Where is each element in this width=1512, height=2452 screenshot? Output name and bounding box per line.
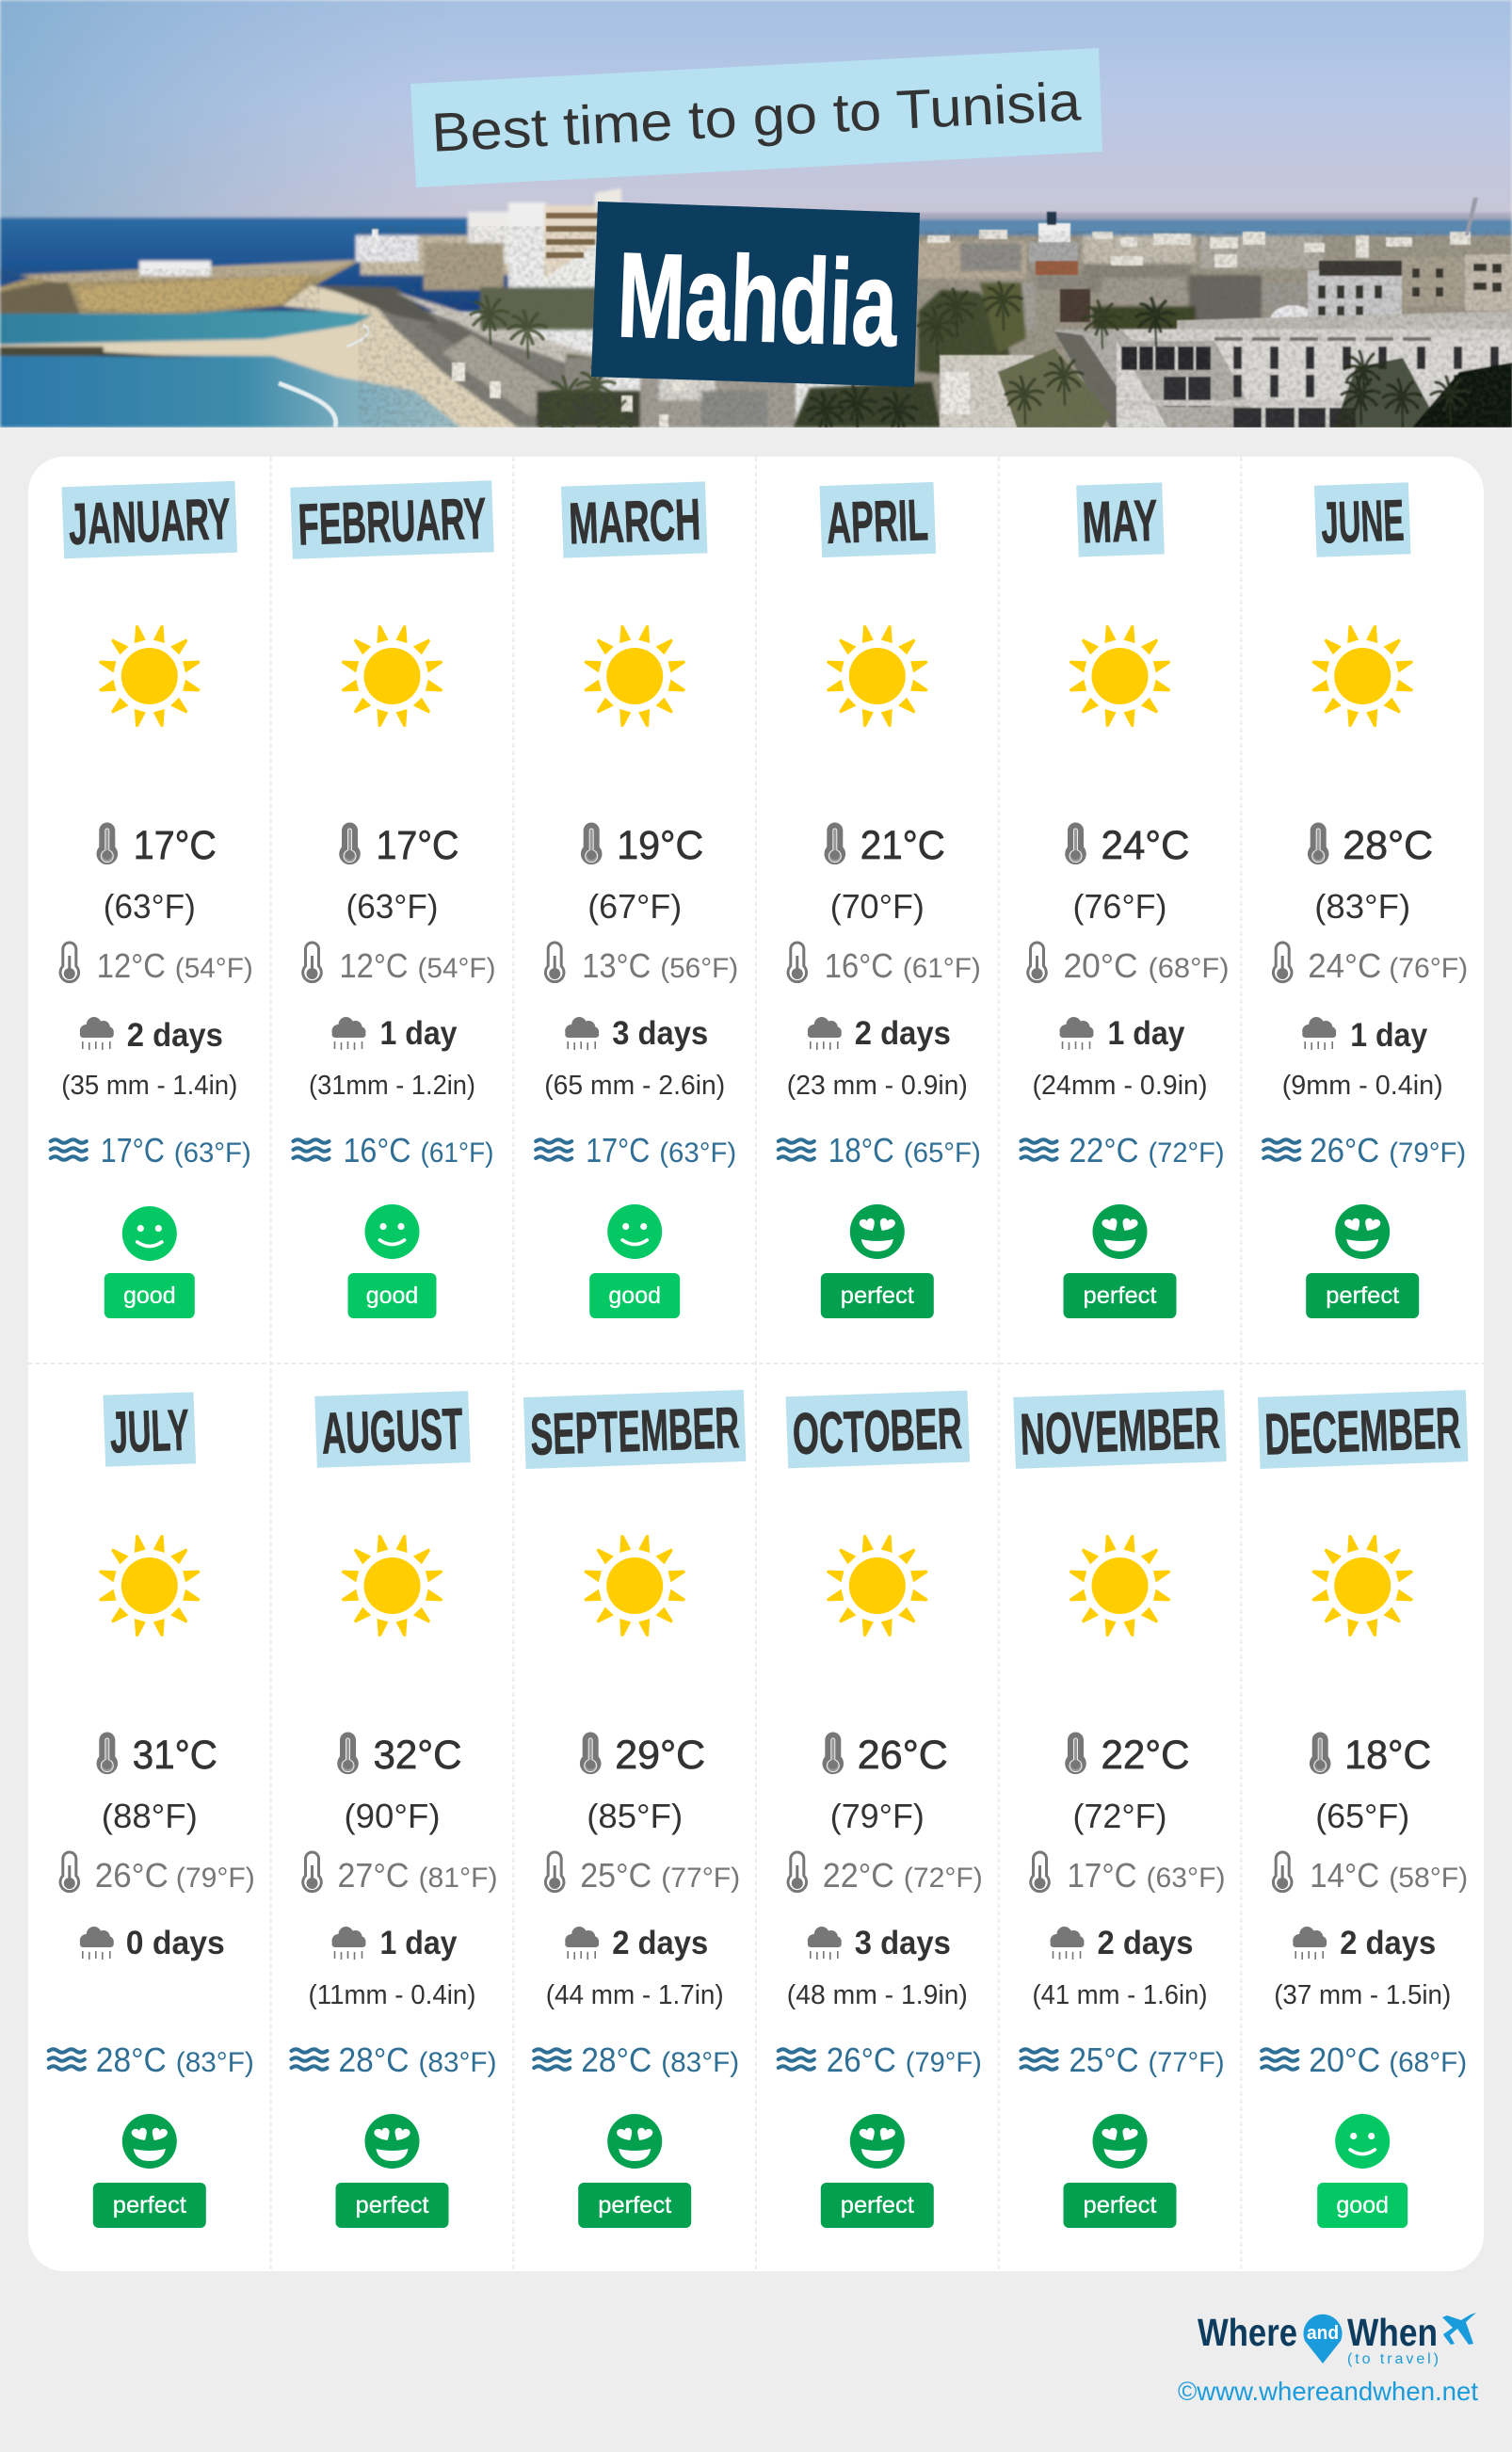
month label: APRIL xyxy=(826,488,929,557)
sea temperature: 25°C xyxy=(1070,2041,1139,2079)
sea temperature xyxy=(1262,2041,1467,2079)
low temperature: (54°F) xyxy=(175,953,253,984)
logo: Where and When (to travel): When xyxy=(1347,2311,1438,2354)
rainfall: (9mm - 0.4in) xyxy=(1282,1071,1443,1101)
sea temperature: (61°F) xyxy=(420,1137,493,1169)
rain days: 1 day xyxy=(1107,1015,1185,1052)
month: April xyxy=(779,482,981,1318)
month label: FEBRUARY xyxy=(297,487,488,557)
rain days xyxy=(808,1925,951,1961)
low temperature: (81°F) xyxy=(418,1863,498,1894)
low temperature: 27°C xyxy=(337,1856,409,1895)
sea temperature: (72°F) xyxy=(1149,1137,1224,1169)
sea temperature: 17°C xyxy=(101,1131,165,1170)
low temperature: 20°C xyxy=(1064,946,1137,985)
title banner: Best time to go to Tunisia: Best time to go to Tunisia xyxy=(430,71,1083,164)
icon: sun xyxy=(1311,625,1414,727)
low temperature: (54°F) xyxy=(418,953,495,984)
rain days: 2 days xyxy=(127,1017,223,1054)
high temperature xyxy=(341,823,459,868)
rating: perfect xyxy=(1064,2114,1177,2228)
month: November xyxy=(1013,1390,1227,2228)
sea temperature xyxy=(536,1131,736,1170)
low temperature: 26°C xyxy=(95,1856,169,1895)
rain days xyxy=(1302,1017,1428,1054)
low temperature xyxy=(1273,1852,1468,1895)
sea temperature: 18°C xyxy=(828,1131,894,1170)
fine photo detail xyxy=(279,198,1512,445)
rating: perfect xyxy=(335,2114,448,2228)
rain days: 2 days xyxy=(1340,1925,1436,1961)
rating: perfect: perfect xyxy=(1083,1282,1157,1309)
high temperature: 24°C xyxy=(1102,823,1190,868)
sea temperature xyxy=(779,1131,981,1170)
rain days xyxy=(80,1925,225,1961)
icon: sun xyxy=(826,625,928,727)
sea temperature: 26°C xyxy=(827,2041,896,2079)
logo: Where and When (to travel) xyxy=(1198,2311,1476,2367)
high fahrenheit: (85°F) xyxy=(587,1797,683,1835)
rain days xyxy=(565,1925,708,1961)
month label xyxy=(820,482,936,557)
month label: SEPTEMBER xyxy=(529,1395,740,1468)
rating: good xyxy=(348,1204,437,1318)
high temperature: 19°C xyxy=(617,823,703,868)
rainfall: (44 mm - 1.7in) xyxy=(546,1980,724,2010)
low temperature xyxy=(545,943,738,985)
low temperature xyxy=(1028,943,1230,985)
sea temperature: (83°F) xyxy=(418,2047,497,2078)
rating: perfect xyxy=(1306,1204,1419,1318)
month label xyxy=(523,1390,746,1469)
month label xyxy=(1013,1390,1227,1469)
sea temperature xyxy=(51,1131,251,1170)
month: June xyxy=(1263,482,1468,1318)
low temperature: 12°C xyxy=(97,946,166,985)
rain days: 2 days xyxy=(612,1925,708,1961)
high fahrenheit: (67°F) xyxy=(587,887,682,926)
rain days: 0 days xyxy=(126,1925,225,1961)
high fahrenheit: (72°F) xyxy=(1073,1797,1167,1835)
low temperature xyxy=(1273,943,1468,985)
rating: good: good xyxy=(366,1282,418,1309)
high temperature: 31°C xyxy=(133,1733,217,1778)
month label xyxy=(314,1391,471,1468)
city banner: Mahdia xyxy=(591,202,920,387)
month label: OCTOBER xyxy=(792,1396,963,1467)
rain days xyxy=(1060,1015,1185,1052)
icon: sun xyxy=(584,1535,686,1637)
icon: sun xyxy=(341,625,443,727)
rainfall: (35 mm - 1.4in) xyxy=(61,1071,237,1101)
rating: good xyxy=(589,1204,680,1318)
high temperature: 17°C xyxy=(377,823,459,868)
month label: MAY xyxy=(1081,489,1159,556)
month label: JUNE xyxy=(1320,488,1405,557)
rain days: 1 day xyxy=(1350,1017,1428,1054)
month: March xyxy=(536,481,738,1318)
sea temperature: (63°F) xyxy=(659,1137,736,1169)
high fahrenheit: (63°F) xyxy=(104,887,196,926)
icon: sun xyxy=(826,1535,928,1637)
icon: sun xyxy=(341,1535,443,1637)
icon: sun xyxy=(1069,1535,1171,1637)
icon: map pin: and xyxy=(1307,2323,1339,2344)
rating: perfect xyxy=(93,2114,206,2228)
month label xyxy=(62,481,237,558)
sea temperature xyxy=(1021,1131,1224,1170)
sea temperature xyxy=(49,2041,254,2079)
month: August xyxy=(292,1391,497,2228)
rainfall: (23 mm - 0.9in) xyxy=(787,1071,968,1101)
icon: airplane xyxy=(1442,2313,1476,2345)
rating: good: good xyxy=(1336,2192,1389,2218)
low temperature: 25°C xyxy=(580,1856,651,1895)
rainfall: (37 mm - 1.5in) xyxy=(1274,1980,1451,2010)
sea temperature xyxy=(534,2041,739,2079)
month: October xyxy=(779,1391,983,2228)
sea temperature: (65°F) xyxy=(904,1137,981,1169)
month label xyxy=(1076,482,1165,557)
rating: good xyxy=(1317,2114,1407,2228)
rain days: 1 day xyxy=(380,1015,458,1052)
sea temperature xyxy=(779,2041,982,2079)
low temperature: 17°C xyxy=(1068,1856,1137,1895)
rainfall: (11mm - 0.4in) xyxy=(309,1980,476,2010)
rating: perfect xyxy=(821,1204,934,1318)
sea temperature: (79°F) xyxy=(906,2047,982,2078)
website credit: ©www.whereandwhen.net xyxy=(1178,2377,1478,2406)
high temperature: 21°C xyxy=(861,823,945,868)
rain days xyxy=(1051,1925,1194,1961)
rain days: 2 days xyxy=(855,1015,951,1052)
high temperature: 17°C xyxy=(134,823,217,868)
high fahrenheit: (70°F) xyxy=(830,887,925,926)
rating: perfect: perfect xyxy=(598,2192,671,2218)
hero photo: Mahdia coastline xyxy=(0,0,1512,445)
month: January xyxy=(51,481,253,1318)
sea temperature: 16°C xyxy=(343,1131,410,1170)
rating: good: good xyxy=(608,1282,661,1309)
month label: AUGUST xyxy=(320,1396,464,1467)
sea temperature xyxy=(294,1131,493,1170)
low temperature xyxy=(303,943,495,985)
low temperature: 22°C xyxy=(823,1856,894,1895)
sea temperature: (68°F) xyxy=(1389,2047,1467,2078)
rain days xyxy=(331,1015,458,1052)
sea temperature: (83°F) xyxy=(176,2047,254,2078)
rating: perfect xyxy=(821,2114,934,2228)
rating: perfect: perfect xyxy=(356,2192,429,2218)
high temperature: 22°C xyxy=(1102,1733,1190,1778)
city banner: Mahdia: Mahdia xyxy=(616,228,900,372)
rating: good xyxy=(105,1206,195,1318)
icon: sun xyxy=(98,1535,201,1637)
low temperature: 16°C xyxy=(825,946,893,985)
low temperature: (79°F) xyxy=(176,1863,255,1894)
high fahrenheit: (76°F) xyxy=(1073,887,1167,926)
rating: perfect xyxy=(578,2114,691,2228)
icon: sun xyxy=(1311,1535,1414,1637)
high temperature xyxy=(98,823,217,868)
rating: perfect: perfect xyxy=(113,2192,186,2218)
rainfall: (41 mm - 1.6in) xyxy=(1032,1980,1207,2010)
high fahrenheit: (63°F) xyxy=(346,887,439,926)
high temperature xyxy=(98,1733,217,1778)
low temperature: (61°F) xyxy=(903,953,981,984)
rainfall: (48 mm - 1.9in) xyxy=(787,1980,968,2010)
low temperature: (77°F) xyxy=(661,1863,740,1894)
rain days xyxy=(565,1015,708,1052)
logo: Where and When (to travel): Where xyxy=(1198,2311,1297,2354)
month label xyxy=(1314,482,1410,557)
low temperature: 12°C xyxy=(339,946,409,985)
icon: sun xyxy=(584,625,686,727)
month: May xyxy=(1021,482,1230,1318)
rain days: 3 days xyxy=(855,1925,951,1961)
sea temperature: 26°C xyxy=(1310,1131,1379,1170)
low temperature xyxy=(788,1852,983,1895)
high temperature: 29°C xyxy=(615,1733,705,1778)
rating: good: good xyxy=(123,1282,176,1309)
low temperature xyxy=(60,943,253,985)
sea temperature xyxy=(1021,2041,1224,2079)
panel: monthly weather grid xyxy=(28,457,1484,2271)
rain days: 2 days xyxy=(1098,1925,1194,1961)
high fahrenheit: (79°F) xyxy=(830,1797,925,1835)
low temperature xyxy=(1031,1852,1226,1895)
sea temperature: 28°C xyxy=(339,2041,409,2079)
low temperature: 13°C xyxy=(582,946,651,985)
rain days xyxy=(331,1925,458,1961)
low temperature xyxy=(545,1852,740,1895)
low temperature: (63°F) xyxy=(1147,1863,1226,1894)
sea temperature xyxy=(1263,1131,1466,1170)
sea temperature: (79°F) xyxy=(1389,1137,1466,1169)
month label: NOVEMBER xyxy=(1019,1395,1221,1468)
month label: JULY xyxy=(109,1398,190,1465)
month: July xyxy=(49,1392,255,2228)
rating: perfect xyxy=(1064,1204,1177,1318)
low temperature xyxy=(60,1852,255,1895)
low temperature: (58°F) xyxy=(1389,1863,1468,1894)
high fahrenheit: (83°F) xyxy=(1314,887,1410,926)
sea temperature: 20°C xyxy=(1309,2041,1380,2079)
sea temperature: 22°C xyxy=(1070,1131,1139,1170)
rainfall: (65 mm - 2.6in) xyxy=(544,1071,725,1101)
sea temperature: 28°C xyxy=(581,2041,651,2079)
month: February xyxy=(290,480,495,1318)
high fahrenheit: (88°F) xyxy=(102,1797,198,1835)
high fahrenheit: (90°F) xyxy=(344,1797,441,1835)
rain days xyxy=(1293,1925,1436,1961)
month: December xyxy=(1258,1390,1468,2228)
month label xyxy=(104,1392,196,1467)
low temperature: (56°F) xyxy=(660,953,738,984)
month label: JANUARY xyxy=(68,487,232,557)
high temperature: 32°C xyxy=(373,1733,461,1778)
icon: sun xyxy=(1069,625,1171,727)
high temperature: 18°C xyxy=(1344,1733,1431,1778)
rain days xyxy=(80,1017,223,1054)
title banner: Best time to go to Tunisia xyxy=(410,48,1102,187)
sea temperature: (77°F) xyxy=(1149,2047,1224,2078)
month label xyxy=(290,480,494,559)
high fahrenheit: (65°F) xyxy=(1315,1797,1409,1835)
rain days: 3 days xyxy=(612,1015,708,1052)
low temperature xyxy=(788,943,981,985)
rain days: 1 day xyxy=(380,1925,458,1961)
low temperature xyxy=(303,1852,497,1895)
high temperature: 28°C xyxy=(1343,823,1433,868)
high temperature xyxy=(582,823,703,868)
high temperature xyxy=(1311,1733,1431,1778)
sea temperature xyxy=(292,2041,497,2079)
low temperature: (68°F) xyxy=(1149,953,1230,984)
rating: perfect: perfect xyxy=(841,2192,914,2218)
sea temperature: 28°C xyxy=(96,2041,167,2079)
rainfall: (24mm - 0.9in) xyxy=(1032,1071,1207,1101)
rating: perfect: perfect xyxy=(1083,2192,1157,2218)
sea temperature: 17°C xyxy=(586,1131,650,1170)
month label: MARCH xyxy=(568,488,701,557)
rainfall: (31mm - 1.2in) xyxy=(309,1071,475,1101)
month: September xyxy=(523,1390,746,2228)
low temperature: 14°C xyxy=(1310,1856,1379,1895)
low temperature: (76°F) xyxy=(1389,953,1468,984)
sea temperature: (83°F) xyxy=(661,2047,739,2078)
month label xyxy=(561,481,707,558)
month label xyxy=(786,1391,970,1468)
logo: Where and When (to travel): (to travel) xyxy=(1347,2351,1439,2367)
icon: sun xyxy=(98,625,201,727)
low temperature: (72°F) xyxy=(904,1863,983,1894)
high temperature xyxy=(826,823,945,868)
rain days xyxy=(808,1015,951,1052)
rating: perfect: perfect xyxy=(841,1282,914,1309)
icon: map pin xyxy=(1303,2315,1343,2363)
sea temperature: (63°F) xyxy=(174,1137,251,1169)
high temperature: 26°C xyxy=(858,1733,948,1778)
low temperature: 24°C xyxy=(1308,946,1381,985)
rating: perfect: perfect xyxy=(1326,1282,1399,1309)
